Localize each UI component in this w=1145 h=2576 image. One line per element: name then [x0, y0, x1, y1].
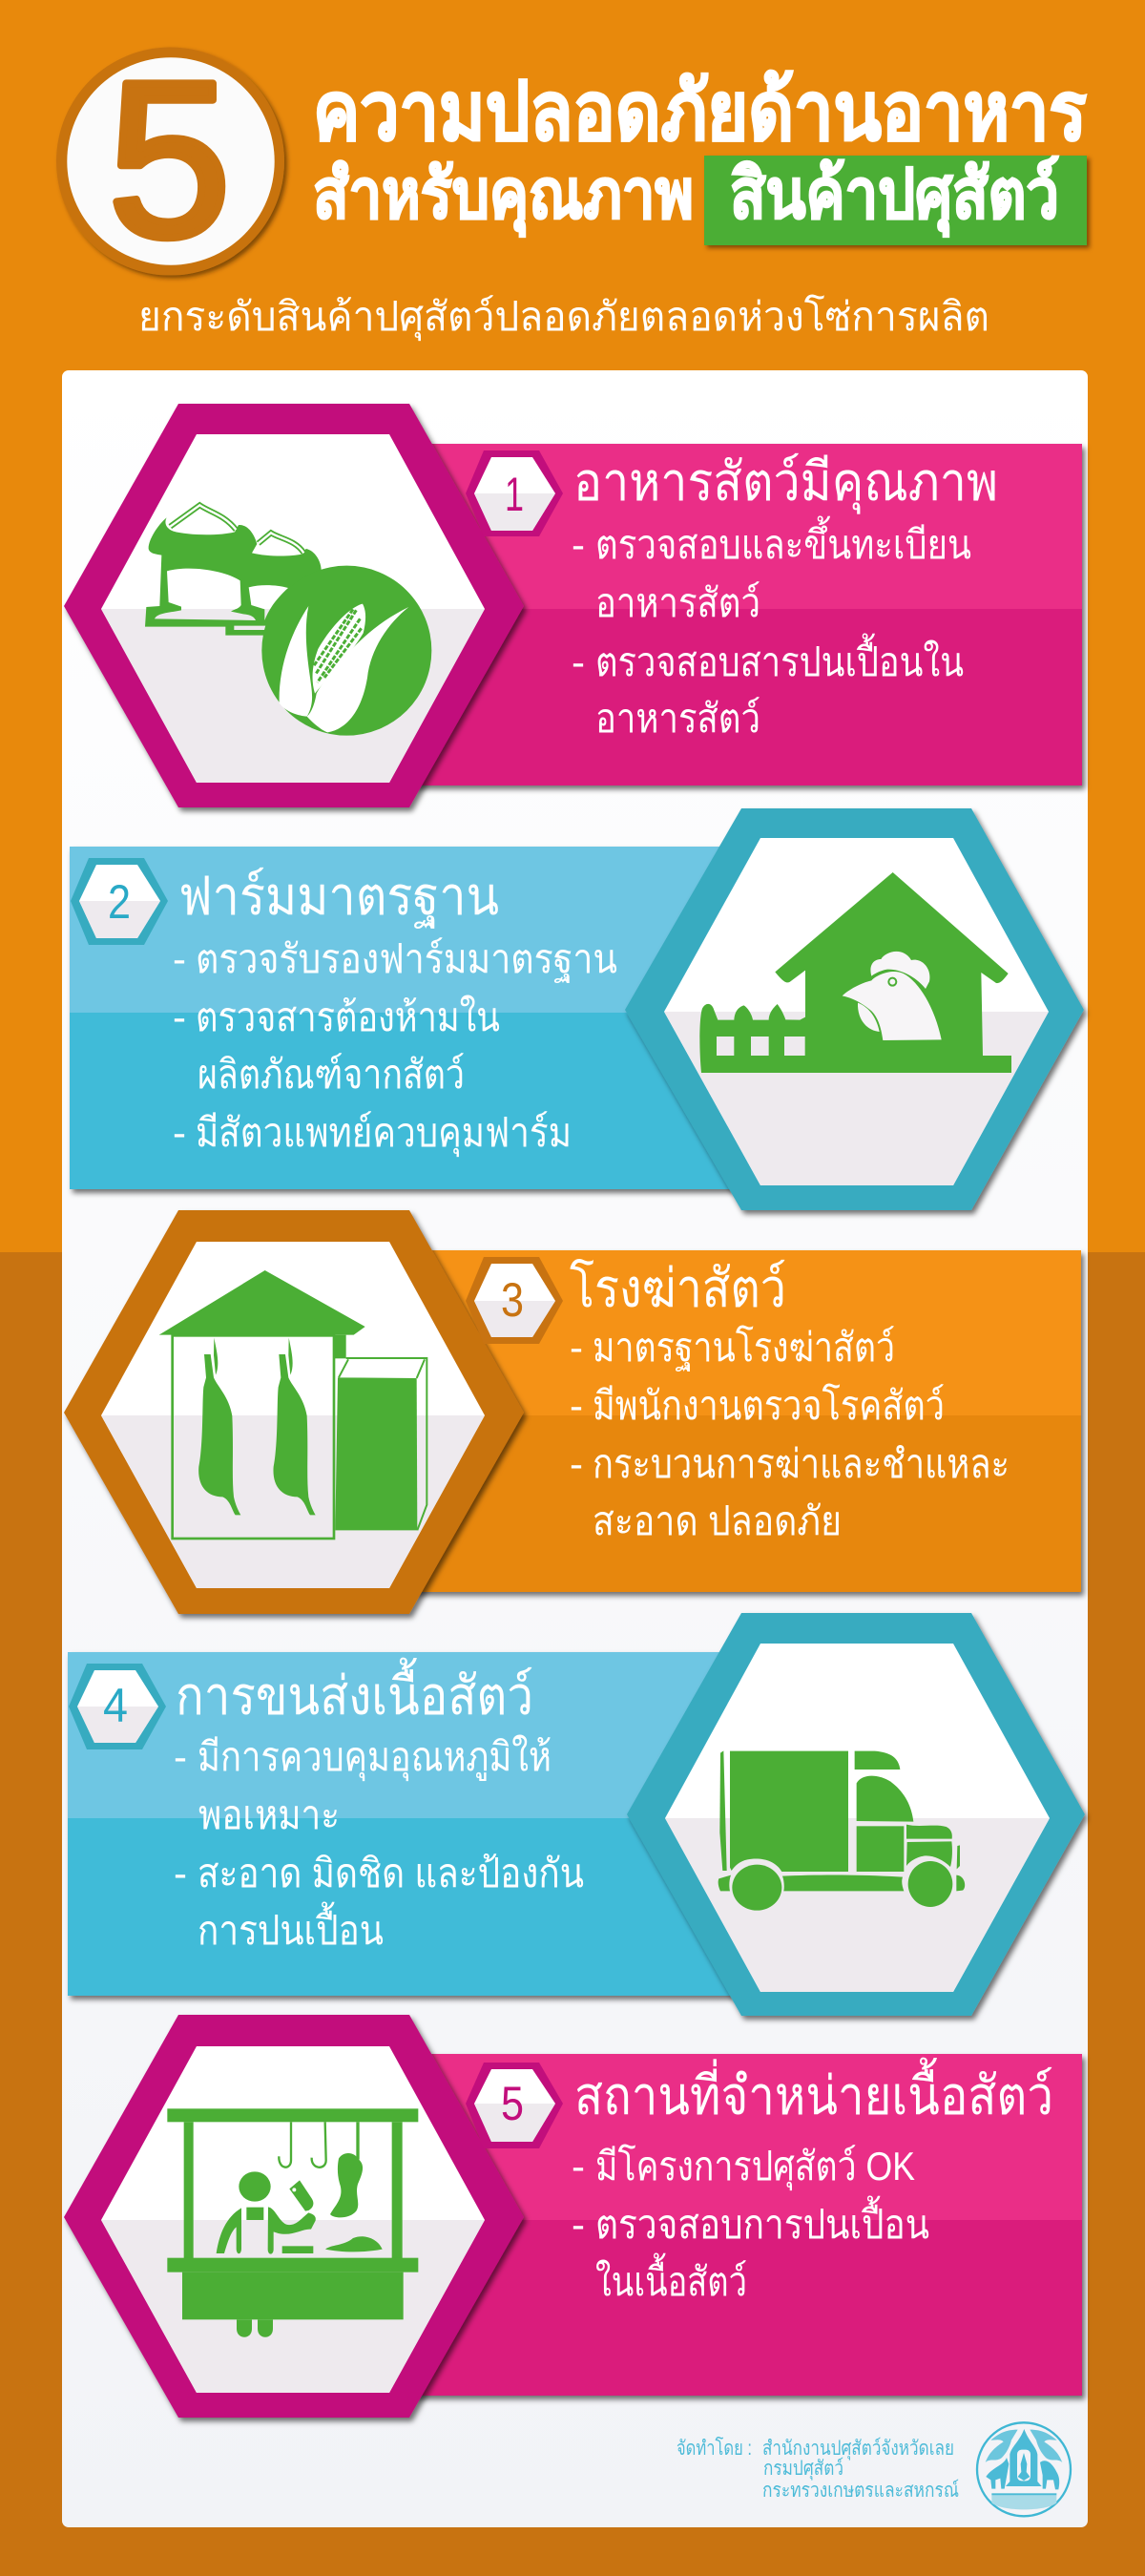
bullet text 3: กระบวนการฆ่าและชำแหละ: [593, 1441, 1010, 1486]
number badge 4: 4: [103, 1679, 128, 1732]
panel 3: slaughterhouse: [64, 1210, 1081, 1614]
title line 2: สำหรับคุณภาพ: [313, 157, 694, 238]
bullet text 4: [174, 1734, 584, 1953]
panel 5: meat retail: [64, 2015, 1082, 2418]
icon: refrigerated truck: [718, 1750, 965, 1911]
bullet text 4: -: [174, 1851, 187, 1895]
heading 5: สถานที่จำหน่ายเนื้อสัตว์: [574, 2058, 1053, 2126]
badge: number 5: [56, 36, 284, 283]
icon: butcher stall: [167, 2108, 418, 2337]
bullet text 2: ตรวจรับรองฟาร์มมาตรฐาน: [196, 936, 617, 983]
number badge 5: 5: [501, 2077, 524, 2130]
number badge 2: [71, 858, 168, 945]
footer credit text: [677, 2437, 959, 2502]
title highlight: green box: สินค้าปศุสัตว์: [730, 156, 1059, 238]
hexagon 4: [627, 1613, 1085, 2016]
hexagon 3: [64, 1210, 524, 1614]
heading 4: การขนส่งเนื้อสัตว์: [176, 1658, 533, 1726]
footer credit text: กระทรวงเกษตรและสหกรณ์: [762, 2479, 959, 2502]
heading 3: โรงฆ่าสัตว์: [570, 1258, 786, 1318]
bullet text 2: [173, 936, 617, 1158]
bullet text 3: มีพนักงานตรวจโรคสัตว์: [593, 1382, 945, 1428]
bullet text 2: -: [173, 936, 186, 981]
panel 1: animal feed: [64, 404, 1082, 807]
bullet text 5: ในเนื้อสัตว์: [595, 2252, 747, 2304]
icon: Department of Livestock logo: [977, 2422, 1071, 2516]
number badge 3: 3: [501, 1273, 524, 1327]
bullet text 5: ตรวจสอบการปนเปื้อน: [595, 2195, 929, 2247]
number badge 1: [466, 450, 563, 536]
hexagon 2: [625, 808, 1084, 1210]
footer credit text: สำนักงานปศุสัตว์จังหวัดเลย: [762, 2437, 954, 2461]
hexagon 5: [64, 2015, 524, 2418]
heading 1: อาหารสัตว์มีคุณภาพ: [573, 451, 998, 514]
panel 2: standard farm: [70, 808, 1084, 1210]
number badge 3: [466, 1257, 563, 1344]
bullet text 2: ตรวจสารต้องห้ามใน: [196, 995, 500, 1039]
background: lower brown-orange: [0, 1252, 1145, 2576]
hexagon 1: [64, 404, 524, 807]
number badge 2: 2: [108, 875, 131, 929]
bullet text 2: -: [173, 995, 186, 1039]
bullet text 1: อาหารสัตว์: [595, 580, 760, 625]
number badge 4: [69, 1664, 166, 1749]
bullet text 5: [572, 2143, 929, 2304]
band 4: [68, 1652, 763, 1996]
heading 2: ฟาร์มมาตรฐาน: [178, 866, 499, 928]
bullet text 1: -: [572, 639, 585, 684]
white content card: [62, 370, 1088, 2527]
bullet text 3: [570, 1324, 1010, 1543]
bullet text 3: สะอาด ปลอดภัย: [593, 1498, 842, 1543]
subtitle: ยกระดับสินค้าปศุสัตว์ปลอดภัยตลอดห่วงโซ่การผลิต: [138, 293, 989, 342]
bullet text 1: ตรวจสอบสารปนเปื้อนใน: [595, 633, 964, 684]
bullet text 1: -: [572, 522, 585, 567]
icon: feed sacks and corn: [145, 505, 431, 736]
bullet text 4: -: [174, 1734, 187, 1779]
bullet text 2: ผลิตภัณฑ์จากสัตว์: [198, 1052, 465, 1097]
band 3: [382, 1250, 1081, 1592]
bullet text 5: -: [572, 2144, 585, 2189]
number badge 1: 1: [505, 468, 524, 521]
icon: farm house and chicken: [699, 872, 1011, 1073]
footer credit text: จัดทำโดย :: [677, 2437, 752, 2460]
bullet text 3: -: [570, 1383, 583, 1428]
band 1: [382, 444, 1082, 785]
bullet text 1: ตรวจสอบและขึ้นทะเบียน: [595, 515, 971, 567]
bullet text 1: [572, 515, 971, 741]
bullet text 2: มีสัตวแพทย์ควบคุมฟาร์ม: [196, 1110, 572, 1158]
bullet text 1: อาหารสัตว์: [595, 696, 760, 741]
bullet text 3: -: [570, 1441, 583, 1486]
background: upper orange: [0, 0, 1145, 1252]
icon: slaughterhouse with hanging carcasses: [159, 1270, 427, 1539]
bullet text 2: -: [173, 1110, 186, 1155]
number badge 5: [466, 2063, 563, 2148]
bullet text 4: มีการควบคุมอุณหภูมิให้: [198, 1734, 552, 1782]
bullet text 5: -: [572, 2202, 585, 2247]
bullet text 3: มาตรฐานโรงฆ่าสัตว์: [593, 1324, 895, 1372]
bullet text 4: สะอาด มิดชิด และป้องกัน: [198, 1851, 584, 1895]
band 5: [382, 2054, 1082, 2396]
bullet text 4: พอเหมาะ: [198, 1792, 340, 1837]
panel 4: meat transport: [68, 1613, 1085, 2016]
footer credit text: กรมปศุสัตว์: [763, 2457, 843, 2481]
band 2: [70, 847, 763, 1189]
bullet text 5: มีโครงการปศุสัตว์ OK: [595, 2143, 915, 2191]
badge: number 5: 5: [108, 36, 231, 283]
bullet text 4: การปนเปื้อน: [198, 1901, 384, 1953]
bullet text 3: -: [570, 1325, 583, 1370]
